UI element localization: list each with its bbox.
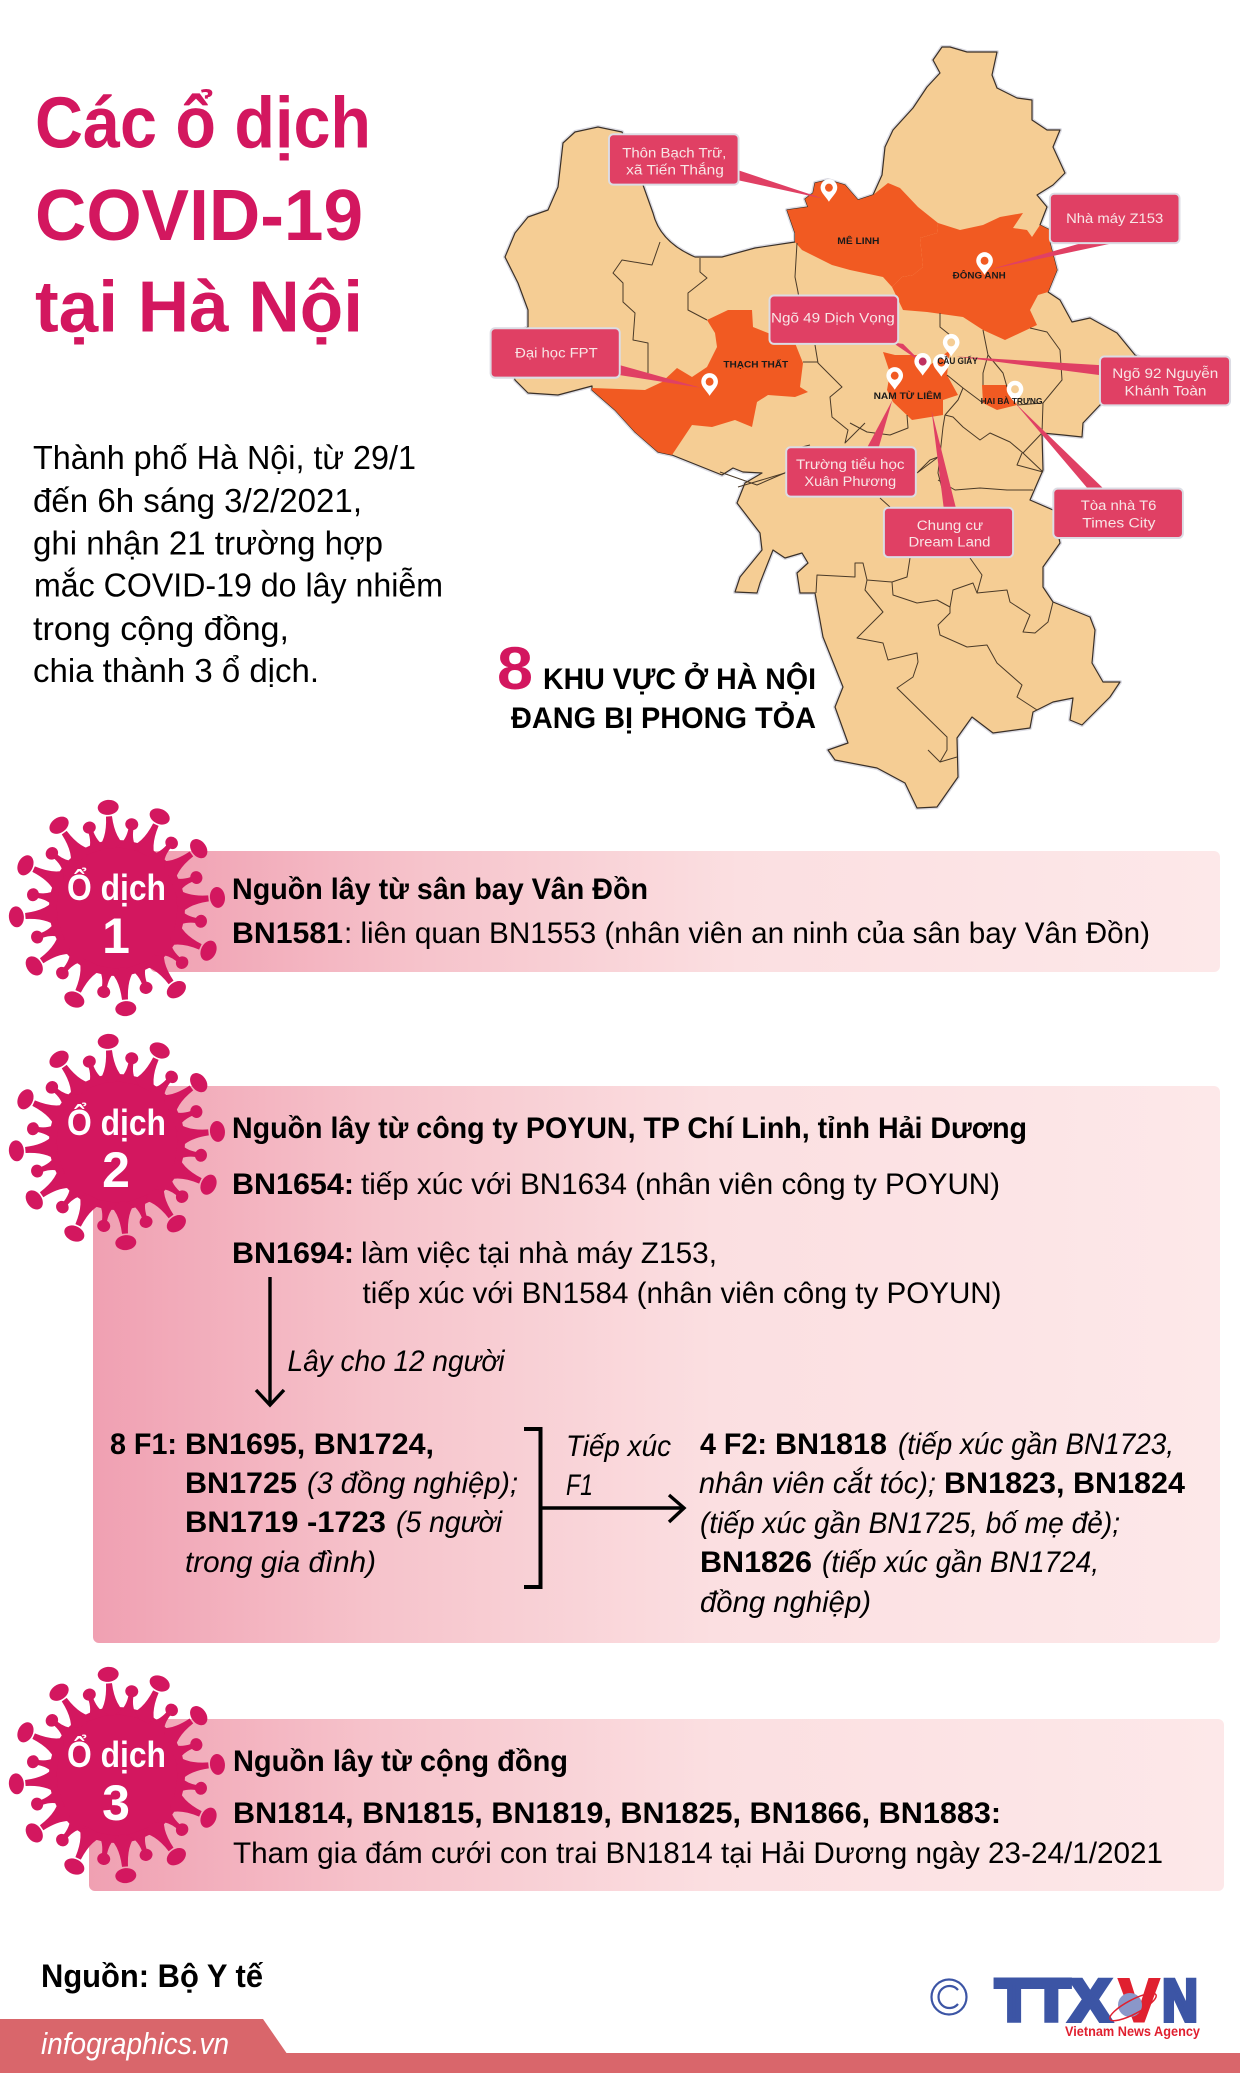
icon: virus badge 3 [8, 1666, 227, 1884]
logo: TTXVN: V [1119, 1967, 1159, 2034]
panel 1 case: BN1581 [232, 917, 343, 950]
callout: Chung cư Dream Land: Dream Land [908, 534, 990, 550]
title: tại Hà Nội [35, 268, 363, 348]
callout: Đại học FPT [491, 328, 620, 378]
icon: virus badge 2: 2 [102, 1142, 130, 1198]
district names: MÊ LINH [837, 235, 879, 246]
source line: Nguồn: Bộ Y tế [41, 1958, 263, 1994]
F2 block: BN1826 [700, 1546, 812, 1579]
panel 3 detail: Tham gia đám cưới con trai BN1814 tại Hải Dương ngày 23-24/1/2021 [233, 1837, 1163, 1870]
F2 block [699, 1428, 1185, 1619]
district names: ĐÔNG ANH [953, 269, 1006, 280]
icon: virus badge 2: Ổ dịch [67, 1100, 166, 1143]
map headline: 8 areas locked down: KHU VỰC Ở HÀ NỘI [543, 662, 816, 696]
F1 block: trong gia đình) [185, 1546, 376, 1579]
intro paragraph [33, 439, 443, 689]
callout: Ngõ 92 Nguyễn Khánh Toàn [1100, 357, 1230, 405]
F1 block: (3 đồng nghiệp); [307, 1467, 518, 1500]
F2 block: BN1823, BN1824 [944, 1467, 1185, 1500]
copyright icon [932, 1980, 966, 2014]
case BN1694 [232, 1237, 1002, 1310]
district names: HAI BÀ TRƯNG [981, 397, 1043, 406]
callout: Thôn Bạch Trữ: xã Tiến Thắng [626, 162, 724, 178]
intro paragraph: Thành phố Hà Nội, từ 29/1 [33, 439, 416, 476]
title: COVID-19 [35, 176, 363, 256]
icon: virus badge 1: 1 [102, 908, 130, 964]
F1 block: BN1695, BN1724, [185, 1428, 434, 1461]
orange district: Mê Linh [787, 180, 938, 287]
arrow label: contact F1: F1 [566, 1469, 593, 1502]
intro paragraph: ghi nhận 21 trường hợp [33, 524, 383, 562]
district names: CẦU GIẤY [937, 356, 978, 366]
logo: TTXVN: N [1162, 1968, 1198, 2034]
intro paragraph: trong cộng đồng, [33, 610, 289, 647]
callout: Nhà máy Z153: Nhà máy Z153 [1066, 211, 1163, 226]
arrow label: contact F1: Tiếp xúc [566, 1430, 671, 1463]
panel 1 heading: Nguồn lây từ sân bay Vân Đồn [232, 873, 648, 906]
arrow: down to F1 [256, 1277, 284, 1405]
intro paragraph: chia thành 3 ổ dịch. [33, 652, 319, 689]
arrow label: contact F1 [566, 1430, 671, 1502]
logo: TTXVN [996, 1967, 1200, 2039]
F2 block: (tiếp xúc gần BN1724, [822, 1546, 1099, 1579]
F2 block: đồng nghiệp) [700, 1586, 871, 1619]
icon: virus badge 3: 3 [102, 1775, 130, 1831]
callout: Ngõ 49 Dịch Vọng [770, 296, 898, 344]
bracket and arrow to F2 [524, 1429, 684, 1587]
callout: Thôn Bạch Trữ: Thôn Bạch Trữ, [622, 145, 726, 160]
F1 block: BN1719 -1723 [185, 1506, 386, 1539]
district names: NAM TỪ LIÊM [874, 390, 941, 401]
panel: outbreak 3 [89, 1719, 1224, 1891]
district names [723, 235, 1043, 406]
icon: virus badge 2 [8, 1033, 227, 1251]
callout: Ngõ 49 Dịch Vọng: Ngõ 49 Dịch Vọng [771, 311, 895, 326]
panel 3 cases: BN1814, BN1815, BN1819, BN1825, BN1866, BN1883: [233, 1797, 1001, 1830]
callout: Ngõ 92 Nguyễn Khánh Toàn: Ngõ 92 Nguyễn [1112, 366, 1218, 381]
icon: virus badge 3: Ổ dịch [67, 1732, 166, 1775]
footer site name: infographics.vn [41, 2026, 229, 2061]
orange district: Nam Từ Liêm [883, 350, 958, 420]
icon: virus badge 1: Ổ dịch [67, 865, 166, 908]
callout: Trường tiểu học Xuân Phương: Xuân Phương [804, 474, 896, 489]
F2 block: nhân viên cắt tóc); [699, 1467, 936, 1500]
panel: outbreak 1 [150, 851, 1220, 972]
intro paragraph: mắc COVID-19 do lây nhiễm [34, 566, 443, 604]
map callouts and pins [491, 134, 1230, 557]
F1 block: 8 F1: [110, 1428, 177, 1461]
F1 block: BN1725 [185, 1467, 297, 1500]
map headline: 8 areas locked down: 8 [497, 635, 533, 702]
case BN1654: BN1654: [232, 1168, 354, 1201]
case BN1694: tiếp xúc với BN1584 (nhân viên công ty POYUN) [362, 1277, 1002, 1310]
case BN1694: làm việc tại nhà máy Z153, [361, 1237, 717, 1270]
arrow label: Lây cho 12 người [288, 1345, 506, 1378]
case BN1654: tiếp xúc với BN1634 (nhân viên công ty POYUN) [361, 1168, 1000, 1201]
base map outline [505, 47, 1150, 808]
F2 block: 4 F2: [700, 1428, 767, 1461]
panel 2 heading: Nguồn lây từ công ty POYUN, TP Chí Linh, tỉnh Hải Dương [232, 1112, 1027, 1145]
case BN1694: BN1694: [232, 1237, 354, 1270]
panel 3 heading: Nguồn lây từ cộng đồng [233, 1745, 568, 1778]
map headline: 8 areas locked down [497, 635, 816, 735]
district names: THẠCH THẤT [723, 359, 789, 370]
orange district: Đông Anh [892, 213, 1057, 340]
icon: virus badge 1 [8, 799, 227, 1017]
F1 block [110, 1428, 518, 1579]
panel 1 case: : liên quan BN1553 (nhân viên an ninh của sân bay Vân Đồn) [344, 917, 1150, 950]
callout: Thôn Bạch Trữ [609, 134, 739, 185]
F2 block: (tiếp xúc gần BN1725, bố mẹ đẻ); [700, 1507, 1120, 1540]
callout pointers [620, 170, 1113, 509]
callout: Trường tiểu học Xuân Phương [786, 447, 916, 497]
logo: TTXVN: Vietnam News Agency [1065, 2023, 1200, 2039]
panel: outbreak 2 [93, 1086, 1220, 1643]
callout: Chung cư Dream Land: Chung cư [917, 518, 983, 533]
F1 block: (5 người [396, 1506, 503, 1539]
callout: Tòa nhà T6 Times City: Tòa nhà T6 [1081, 498, 1156, 513]
logo: TTXVN: TTX [996, 1968, 1111, 2034]
callout: Đại học FPT: Đại học FPT [515, 345, 598, 361]
F2 block: BN1818 [775, 1428, 887, 1461]
orange district: Hai Bà Trưng [982, 385, 1017, 410]
title: Các ổ dịch [35, 84, 371, 164]
callout: Chung cư Dream Land [884, 508, 1013, 557]
footer band [0, 2019, 1240, 2073]
map headline: 8 areas locked down: ĐANG BỊ PHONG TỎA [511, 701, 816, 735]
F2 block: (tiếp xúc gần BN1723, [898, 1428, 1174, 1461]
callout: Tòa nhà T6 Times City: Times City [1082, 515, 1156, 530]
orange district: Thạch Thất [592, 310, 808, 455]
map of Hanoi [505, 47, 1150, 808]
callout: Trường tiểu học Xuân Phương: Trường tiểu học [796, 457, 905, 472]
callout: Tòa nhà T6 Times City [1053, 489, 1183, 538]
title [35, 84, 371, 348]
callout: Nhà máy Z153 [1050, 194, 1179, 243]
callout: Ngõ 92 Nguyễn Khánh Toàn: Khánh Toàn [1125, 383, 1207, 398]
location pins [701, 179, 1023, 403]
intro paragraph: đến 6h sáng 3/2/2021, [33, 482, 362, 519]
